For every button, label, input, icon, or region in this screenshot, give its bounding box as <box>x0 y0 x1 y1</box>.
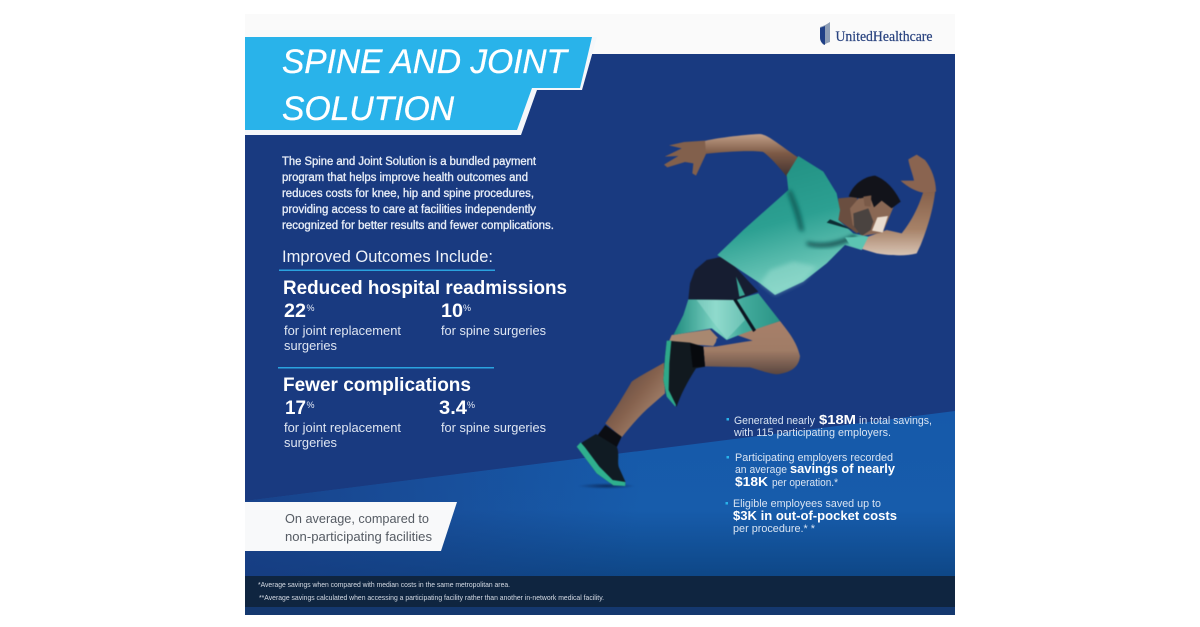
stat: 17% joint replacement: % <box>306 400 315 410</box>
stat: 3.4% spine: 3.4 <box>439 398 467 419</box>
front sock <box>690 343 705 367</box>
ear <box>863 195 871 207</box>
stat: 3.4% spine: for spine surgeries <box>441 420 546 435</box>
shoe shadow <box>578 483 635 489</box>
shirt <box>717 156 868 295</box>
stat: 10% spine <box>441 301 546 338</box>
stat: 22% joint replacement: 22 <box>284 301 306 322</box>
section heading: Fewer complications <box>283 375 471 396</box>
section: fewer complications <box>283 375 546 450</box>
front arm <box>860 190 935 255</box>
title banner <box>245 37 597 135</box>
rear thigh under shorts <box>669 329 718 346</box>
illustration: sprinting runner <box>577 134 936 489</box>
title: SPINE AND JOINT <box>282 43 569 81</box>
front thigh <box>703 321 800 374</box>
bullet: total savings: with 115 participating employers. <box>733 427 891 439</box>
shorts cord <box>733 298 756 332</box>
stat: 17% joint replacement: surgeries <box>284 435 337 450</box>
front hand <box>901 155 936 193</box>
stat: 17% joint replacement: 17 <box>285 398 306 419</box>
bullet: out-of-pocket costs: $3K in out-of-pocket costs <box>733 509 897 523</box>
stat: 10% spine: % <box>463 303 471 313</box>
bullet: savings per operation: Participating employers recorded <box>735 452 893 464</box>
bullet: savings per operation: an average <box>735 464 787 476</box>
bullet: out-of-pocket costs: Eligible employees saved up to <box>733 498 881 510</box>
intro paragraph: recognized for better results and fewer complications. <box>282 220 554 232</box>
back arm <box>703 134 799 177</box>
bullet: total savings: Generated nearly <box>734 415 815 427</box>
stat: 17% joint replacement <box>284 398 401 450</box>
section: reduced hospital readmissions <box>283 278 567 353</box>
stat: 3.4% spine <box>439 398 546 435</box>
title: SOLUTION <box>282 90 454 128</box>
logo wordmark: UnitedHealthcare <box>836 29 933 45</box>
footnote 2: **Average savings calculated when accessing a participating facility rather than another in-network medical facility. <box>259 593 604 602</box>
shirt folds <box>787 189 804 232</box>
stat: 10% spine: 10 <box>441 301 463 322</box>
panel: footnote band <box>245 576 955 615</box>
shorts teal <box>673 293 780 340</box>
bullet: out-of-pocket costs: per procedure.* * <box>733 523 816 535</box>
stat: 22% joint replacement: % <box>306 303 315 313</box>
intro paragraph: program that helps improve health outcomes and <box>282 172 528 184</box>
face highlight <box>872 216 888 233</box>
face <box>850 197 893 236</box>
title <box>282 43 569 128</box>
intro paragraph: providing access to care at facilities independently <box>282 204 536 216</box>
upper body <box>664 134 936 295</box>
bullet: savings per operation <box>726 452 895 489</box>
rear sock <box>596 425 622 447</box>
bullet: out-of-pocket costs <box>726 498 897 535</box>
neck <box>838 197 863 233</box>
intro paragraph: The Spine and Joint Solution is a bundled payment <box>282 156 537 168</box>
beard <box>853 208 873 236</box>
logo: UnitedHealthcare <box>820 22 933 45</box>
rear leg <box>605 363 665 437</box>
section heading: Reduced hospital readmissions <box>283 278 567 299</box>
heading: improved outcomes: Improved Outcomes Include: <box>282 248 493 266</box>
panel: savings bullets <box>726 413 932 535</box>
bullet: total savings: $18M <box>819 413 856 427</box>
stat: 22% joint replacement: for joint replacement <box>284 323 401 338</box>
bullet: savings per operation: per operation.* <box>772 477 839 489</box>
stat: 3.4% spine: % <box>467 400 475 410</box>
hair <box>849 176 901 208</box>
stat: 17% joint replacement: for joint replacement <box>284 420 401 435</box>
shorts dark <box>688 256 758 300</box>
callout: comparison note: non-participating facilities <box>285 530 432 544</box>
bullet: savings per operation: savings of nearly <box>790 462 895 476</box>
back hand <box>664 141 706 176</box>
callout: comparison note: On average, compared to <box>285 512 429 526</box>
stat: 22% joint replacement <box>284 301 401 353</box>
intro paragraph: reduces costs for knee, hip and spine procedures, <box>282 188 534 200</box>
bullet: total savings: in total savings, <box>859 415 932 427</box>
lower body <box>577 256 800 489</box>
callout: comparison note <box>245 502 457 551</box>
icon: logo shield <box>820 22 830 45</box>
stat: 22% joint replacement: surgeries <box>284 338 337 353</box>
bullet: total savings <box>726 413 932 439</box>
panel: infographic background <box>245 14 955 615</box>
intro paragraph <box>282 156 554 232</box>
rear shoe <box>577 434 625 486</box>
panel: lighter blue diagonal floor <box>245 411 955 576</box>
stat: 10% spine: for spine surgeries <box>441 323 546 338</box>
front shoe <box>663 341 705 407</box>
bullet: savings per operation: $18K <box>735 475 768 489</box>
footnote 1: *Average savings when compared with median costs in the same metropolitan area. <box>258 580 510 589</box>
